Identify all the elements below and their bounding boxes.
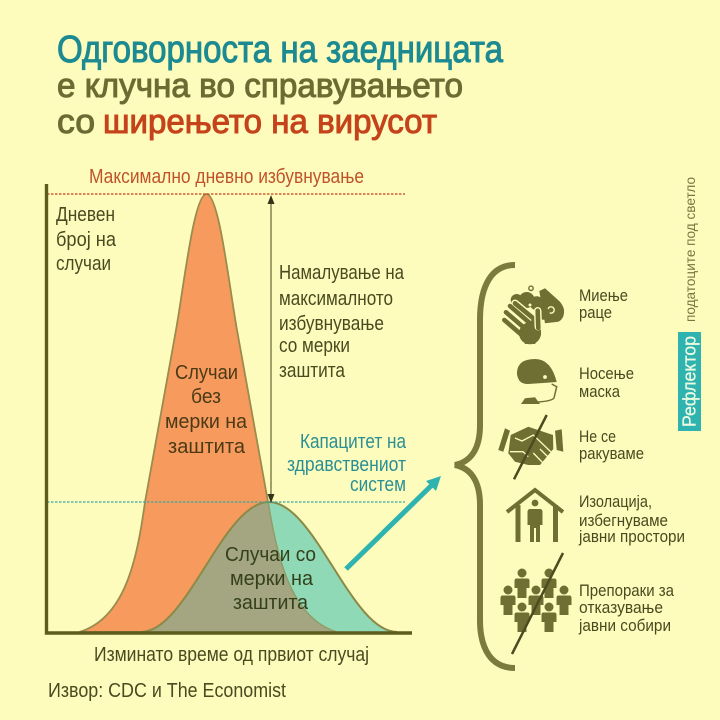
label: isolation — [578, 493, 685, 546]
label: no handshake: Не се — [579, 428, 616, 446]
label: no handshake — [579, 428, 644, 463]
icon: house isolation — [507, 490, 563, 542]
text: reduction of peak: избувнување — [279, 313, 384, 335]
chart: epidemic curves — [46, 184, 441, 633]
text: cases without measures: без — [191, 386, 221, 408]
text: health system capacity — [287, 431, 407, 496]
label: washing hands: раце — [579, 304, 612, 322]
label: maximum daily outbreak: Максимално дневно избувнување — [89, 166, 364, 188]
label: isolation: Изолација, — [579, 493, 652, 511]
axis label: daily cases: Дневен — [56, 204, 115, 226]
label: wearing mask: Носење — [579, 365, 634, 383]
text: cases with measures: заштита — [233, 592, 309, 614]
text: health system capacity: здравствениот — [287, 454, 406, 476]
title: ширењето на вирусот — [103, 103, 437, 141]
badge: Reflektor: Рефлектор — [680, 336, 700, 427]
label: isolation: јавни простори — [578, 528, 685, 546]
axis label: daily cases — [56, 204, 117, 275]
axes — [46, 184, 412, 633]
icon: cancel public gatherings — [500, 553, 572, 654]
label: wearing mask: маска — [579, 383, 621, 401]
title — [57, 29, 504, 141]
label: cancel public gatherings: јавни собири — [578, 617, 671, 635]
label: cancel public gatherings — [578, 582, 675, 635]
text: cases without measures: заштита — [168, 436, 246, 458]
text: cases with measures: Случаи со — [225, 544, 316, 566]
label: wearing mask — [579, 365, 634, 401]
curve overlap region — [150, 503, 336, 632]
curve: cases with protective measures (teal) — [141, 502, 397, 632]
curve: cases without protective measures (orange) — [80, 194, 336, 632]
label: washing hands — [579, 287, 628, 322]
label: isolation: избегнуваме — [579, 512, 668, 530]
text: cases without measures: Случаи — [175, 362, 238, 384]
text: health system capacity: систем — [350, 474, 406, 496]
label: cancel public gatherings: отказување — [579, 599, 663, 617]
title: Одговорноста на заедницата — [57, 29, 504, 71]
text: reduction of peak — [279, 262, 405, 382]
text: cases with measures — [225, 544, 316, 614]
tagline vertical: податоците под светло — [683, 177, 698, 322]
text: reduction of peak: Намалување на — [279, 262, 405, 284]
axis label: time: Изминато време од првиот случај — [94, 644, 369, 666]
axis label: daily cases: случаи — [56, 253, 111, 275]
axis label: daily cases: број на — [56, 229, 117, 251]
text: cases without measures — [165, 362, 248, 458]
arrow: to measures — [346, 476, 441, 569]
icon: no handshake — [498, 415, 563, 479]
icon: wearing mask — [517, 359, 557, 404]
text: reduction of peak: заштита — [279, 360, 346, 382]
text: cases with measures: мерки на — [230, 568, 314, 590]
curve outline with measures — [141, 502, 397, 632]
title: со — [57, 103, 95, 141]
text: cases without measures: мерки на — [165, 411, 248, 433]
text: health system capacity: Капацитет на — [300, 431, 407, 453]
line: maximum daily outbreak — [47, 193, 405, 195]
label: no handshake: ракуваме — [579, 445, 644, 463]
text: reduction of peak: со мерки — [279, 335, 350, 357]
arrow: reduction of peak — [268, 195, 274, 503]
label: washing hands: Миење — [579, 287, 628, 305]
title: е клучна во справувањето — [57, 67, 463, 105]
source: Извор: CDC и The Economist — [48, 680, 286, 702]
icon: washing hands — [504, 286, 564, 344]
line: health system capacity — [47, 501, 405, 503]
label: cancel public gatherings: Препораки за — [579, 582, 675, 600]
text: reduction of peak: максималното — [279, 288, 393, 310]
curly brace — [455, 265, 515, 668]
